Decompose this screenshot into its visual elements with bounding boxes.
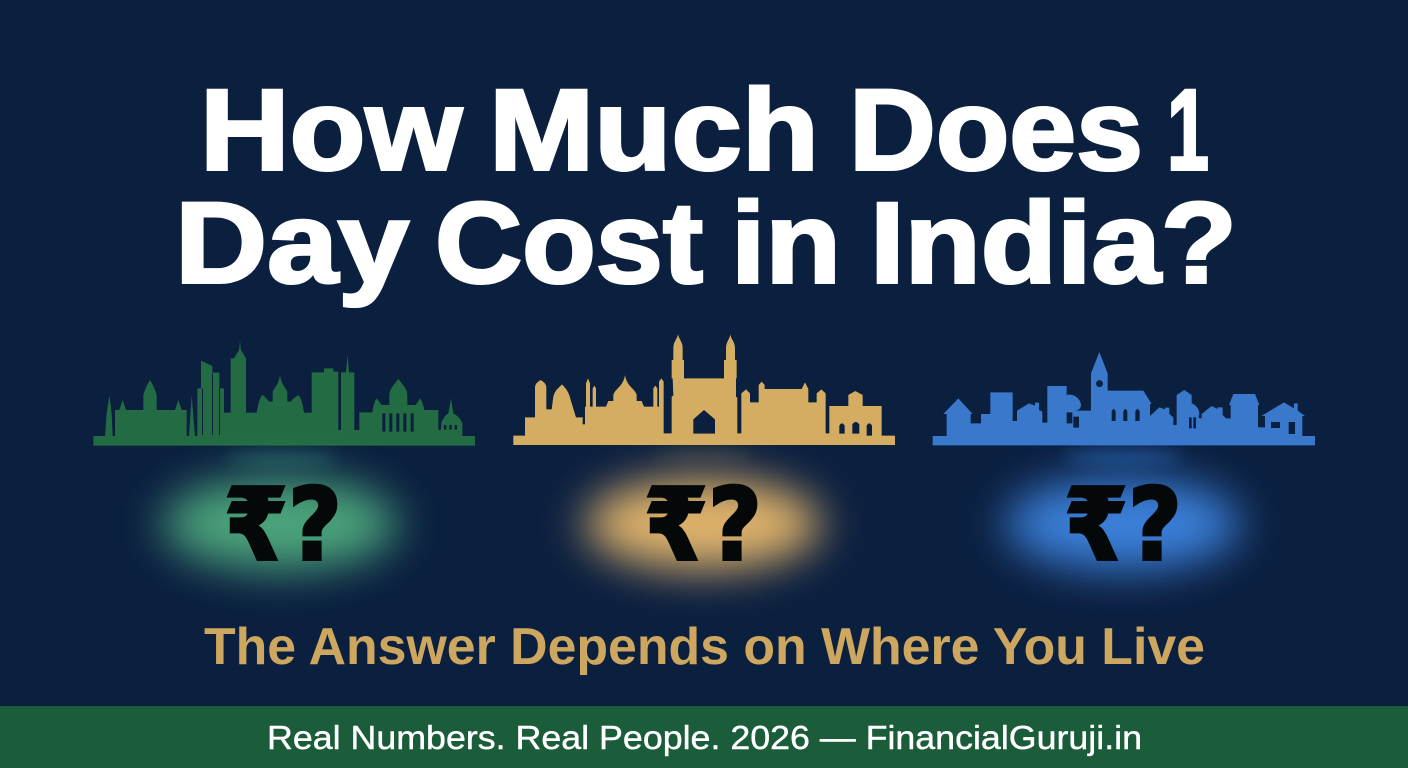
title (175, 66, 1237, 308)
title: Cost (435, 180, 703, 308)
title: in (731, 180, 841, 308)
title: Does (849, 66, 1143, 194)
footer band: Real Numbers. Real People. 2026 — FinancialGuruji.in (267, 719, 1142, 756)
skyline: small town in blue (933, 352, 1315, 463)
glow badge: blue: ? (1128, 466, 1182, 584)
title: 1 (1167, 66, 1209, 194)
title: Much (489, 66, 819, 194)
skyline: metro city in green (93, 340, 475, 466)
title: India? (870, 180, 1237, 308)
title: How (200, 66, 463, 194)
glow badge: green (162, 466, 398, 584)
glow badge: gold (585, 466, 821, 584)
title: Day (175, 180, 409, 308)
skyline: heritage city in gold (513, 334, 895, 460)
glow badge: blue (1005, 466, 1241, 584)
subtitle: The Answer Depends on Where You Live (204, 618, 1205, 676)
glow badge: green: ₹ (224, 466, 288, 584)
footer band (0, 706, 1408, 768)
glow badge: gold: ₹ (644, 466, 708, 584)
glow badge: blue: ₹ (1064, 466, 1128, 584)
glow badge: gold: ? (708, 466, 762, 584)
glow badge: green: ? (288, 466, 342, 584)
